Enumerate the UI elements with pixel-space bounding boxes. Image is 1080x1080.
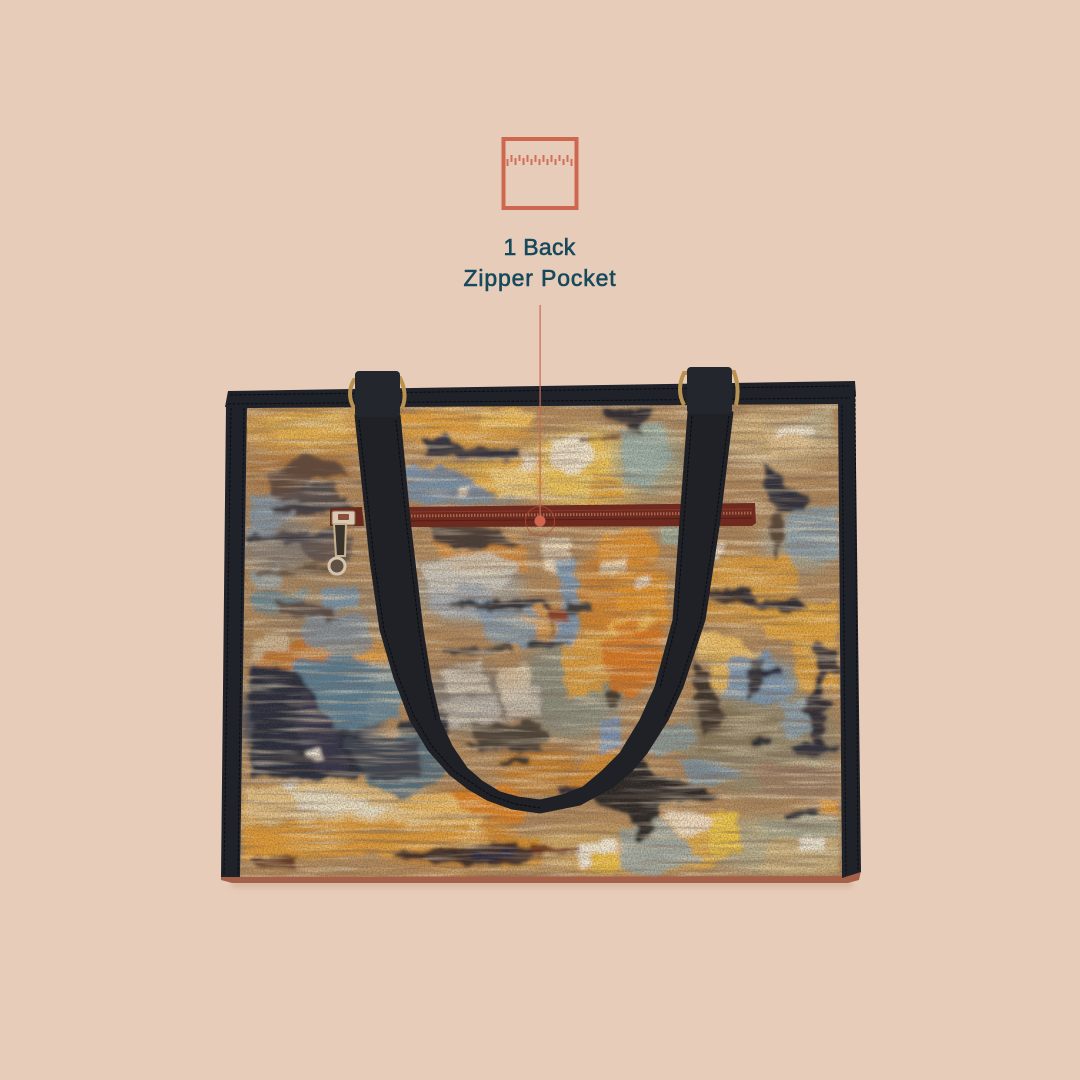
infographic canvas [221,137,861,888]
fabric dark streaks [230,395,850,885]
heading: 1 Back Zipper Pocket: 1 Back [503,234,576,260]
heading: 1 Back Zipper Pocket: Zipper Pocket [464,265,616,291]
bag shadow [232,881,852,887]
bag base trim [221,871,861,883]
black leather frame [221,381,861,878]
blue strokes [405,465,490,502]
white flecks [305,750,322,760]
fabric light streaks [230,395,850,885]
dark strokes [265,455,350,500]
right gold strap ring [680,372,738,405]
fabric print [230,395,850,885]
taupe [745,765,838,800]
icon: back zipper pocket [504,139,576,208]
handbag [221,367,861,887]
right strap loop [687,367,732,414]
callout marker [526,506,554,536]
callout leader line [526,305,554,536]
heading: 1 Back Zipper Pocket [464,234,616,291]
zipper pocket [329,503,756,574]
zipper pull [329,511,355,574]
left gold strap ring [350,378,405,408]
pale streaks [420,552,520,590]
left strap loop [355,371,400,417]
fabric weave texture [230,395,850,885]
light and gold strokes [262,412,350,446]
bag handles [355,367,733,813]
